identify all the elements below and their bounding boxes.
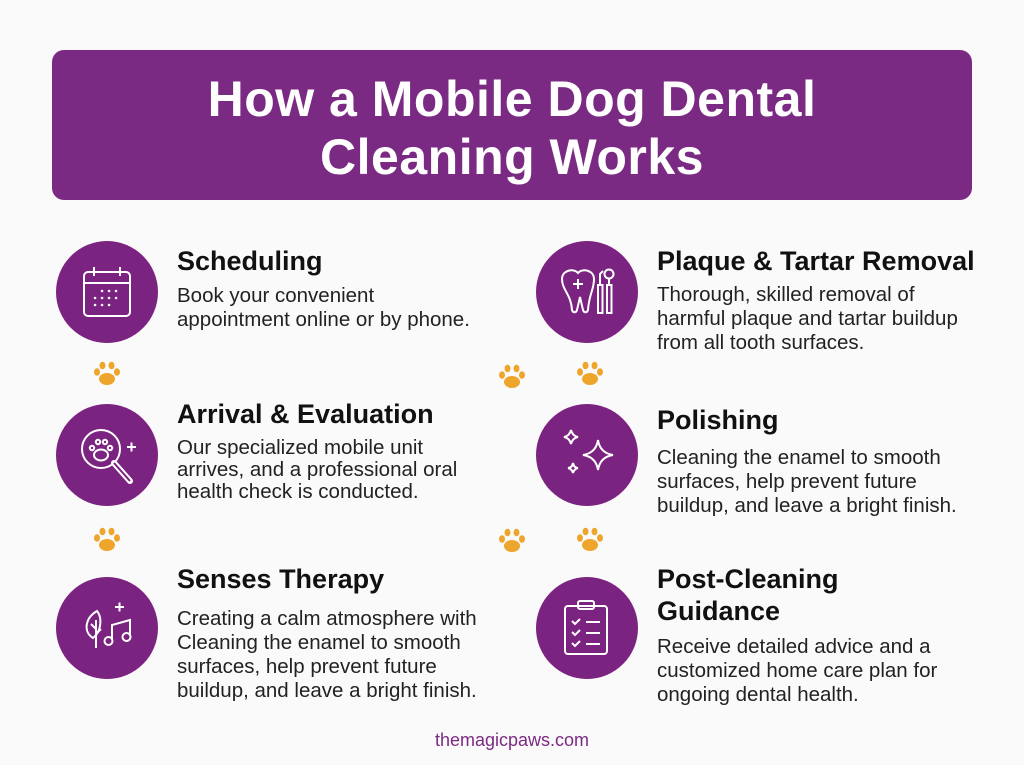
title banner: Cleaning Works bbox=[320, 129, 704, 185]
step: senses therapy: Senses Therapy bbox=[177, 564, 384, 594]
step: senses therapy: buildup, and leave a bright finish. bbox=[177, 679, 477, 702]
title banner bbox=[52, 50, 972, 200]
title banner: How a Mobile Dog Dental bbox=[208, 71, 816, 127]
icon: magnifier paw bbox=[56, 404, 158, 506]
step: polishing: Polishing bbox=[657, 405, 778, 435]
step: arrival: Arrival & Evaluation bbox=[177, 399, 434, 429]
step: plaque removal: Thorough, skilled removal of bbox=[657, 283, 915, 306]
step: guidance: ongoing dental health. bbox=[657, 683, 859, 706]
step: senses therapy: Cleaning the enamel to smooth bbox=[177, 631, 461, 654]
step: senses therapy: Creating a calm atmosphere with bbox=[177, 607, 477, 630]
step: guidance: Post-Cleaning bbox=[657, 564, 839, 594]
step: plaque removal: from all tooth surfaces. bbox=[657, 331, 864, 354]
icon: tooth and tools bbox=[536, 241, 638, 343]
step: plaque removal: Plaque & Tartar Removal bbox=[657, 246, 975, 276]
step: scheduling bbox=[177, 246, 470, 331]
step: senses therapy bbox=[177, 564, 477, 702]
step: plaque removal bbox=[657, 246, 975, 354]
step: arrival: Our specialized mobile unit bbox=[177, 436, 423, 459]
step: polishing bbox=[657, 405, 957, 517]
step: polishing: surfaces, help prevent future bbox=[657, 470, 917, 493]
step: arrival: arrives, and a professional oral bbox=[177, 458, 457, 481]
step: polishing: Cleaning the enamel to smooth bbox=[657, 446, 941, 469]
step: guidance: customized home care plan for bbox=[657, 659, 937, 682]
step: scheduling: appointment online or by phone. bbox=[177, 308, 470, 331]
step: guidance bbox=[657, 564, 937, 706]
step: plaque removal: harmful plaque and tartar buildup bbox=[657, 307, 958, 330]
step: polishing: buildup, and leave a bright finish. bbox=[657, 494, 957, 517]
step: guidance: Receive detailed advice and a bbox=[657, 635, 931, 658]
step: scheduling: Book your convenient bbox=[177, 284, 374, 307]
icon: leaf and music bbox=[56, 577, 158, 679]
icon: clipboard bbox=[536, 577, 638, 679]
step: guidance: Guidance bbox=[657, 596, 780, 626]
step: arrival bbox=[177, 399, 457, 503]
footer url: themagicpaws.com bbox=[435, 730, 589, 750]
step: scheduling: Scheduling bbox=[177, 246, 323, 276]
icon: calendar bbox=[56, 241, 158, 343]
icon: sparkles bbox=[536, 404, 638, 506]
step: arrival: health check is conducted. bbox=[177, 480, 419, 503]
step: senses therapy: surfaces, help prevent future bbox=[177, 655, 437, 678]
